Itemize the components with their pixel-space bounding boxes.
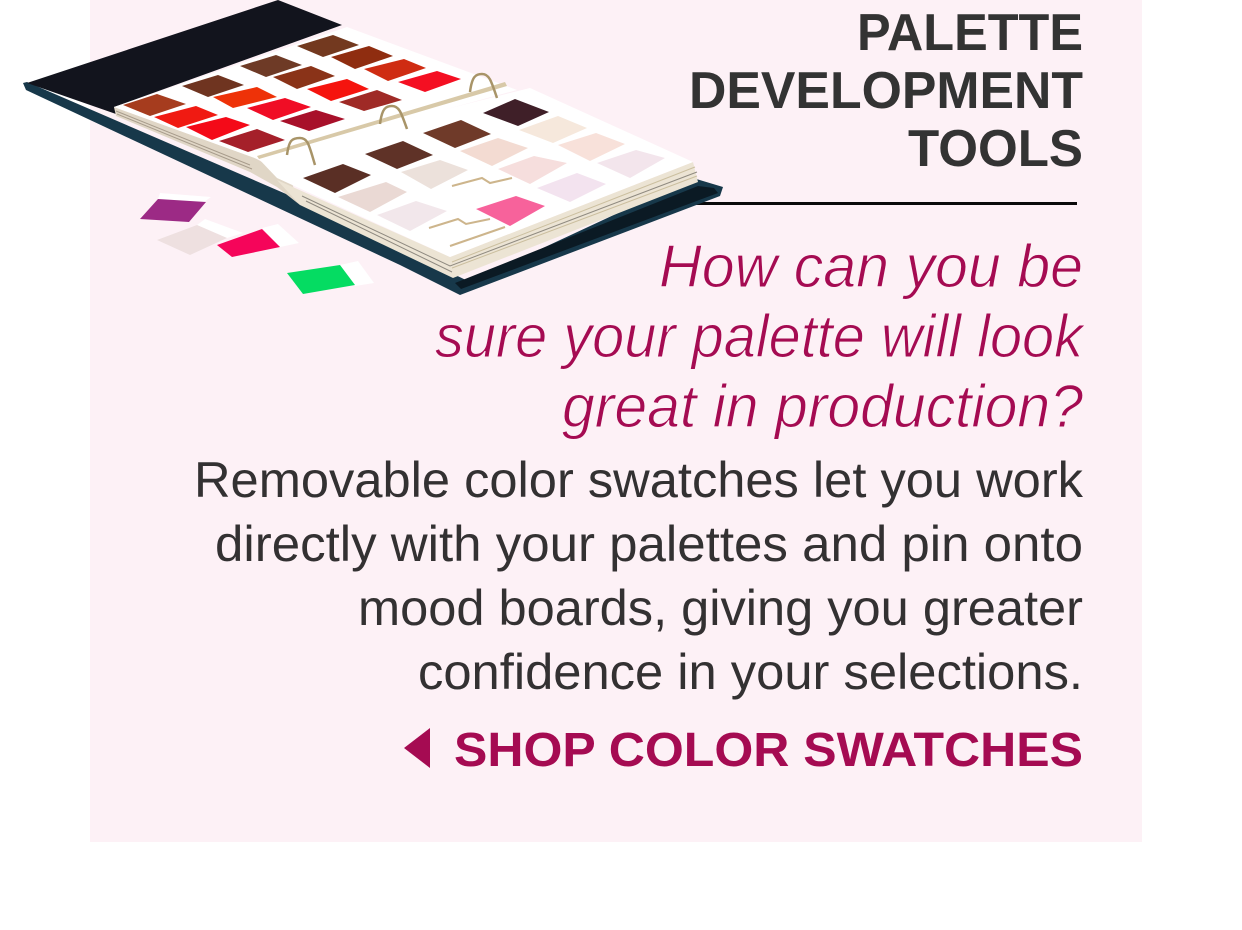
- loose swatches: [140, 193, 374, 294]
- title: [689, 4, 1083, 178]
- subheading question: [435, 233, 1086, 440]
- right page swatches: [303, 99, 665, 231]
- title: TOOLS: [908, 120, 1083, 178]
- loose swatch: crimson: [217, 224, 299, 257]
- divider rule: [690, 202, 1077, 205]
- call to action link: SHOP COLOR SWATCHES: [454, 724, 1083, 777]
- binder rings: [287, 74, 497, 165]
- empty swatch slots: [429, 178, 512, 246]
- body text: directly with your palettes and pin onto: [215, 516, 1083, 572]
- body text: mood boards, giving you greater: [358, 580, 1083, 636]
- title: DEVELOPMENT: [689, 62, 1083, 120]
- panel: pink background: [90, 0, 1142, 842]
- right page block: [257, 88, 698, 278]
- left page block: [114, 27, 517, 205]
- binder cover: [23, 0, 723, 295]
- title: PALETTE: [857, 4, 1083, 62]
- body text: confidence in your selections.: [418, 644, 1083, 700]
- image: open swatch binder: [23, 0, 723, 295]
- subheading question: great in production?: [562, 373, 1084, 440]
- loose swatch: purple: [140, 193, 211, 222]
- loose swatch: green: [287, 261, 374, 294]
- loose swatch: pale pink: [157, 219, 243, 255]
- body text: Removable color swatches let you work: [194, 452, 1084, 508]
- body text: [194, 452, 1084, 700]
- subheading question: How can you be: [659, 233, 1083, 300]
- left page swatches: [123, 35, 461, 152]
- subheading question: sure your palette will look: [435, 303, 1086, 370]
- binder spine bar: [257, 82, 507, 159]
- icon: left arrow: [404, 728, 430, 768]
